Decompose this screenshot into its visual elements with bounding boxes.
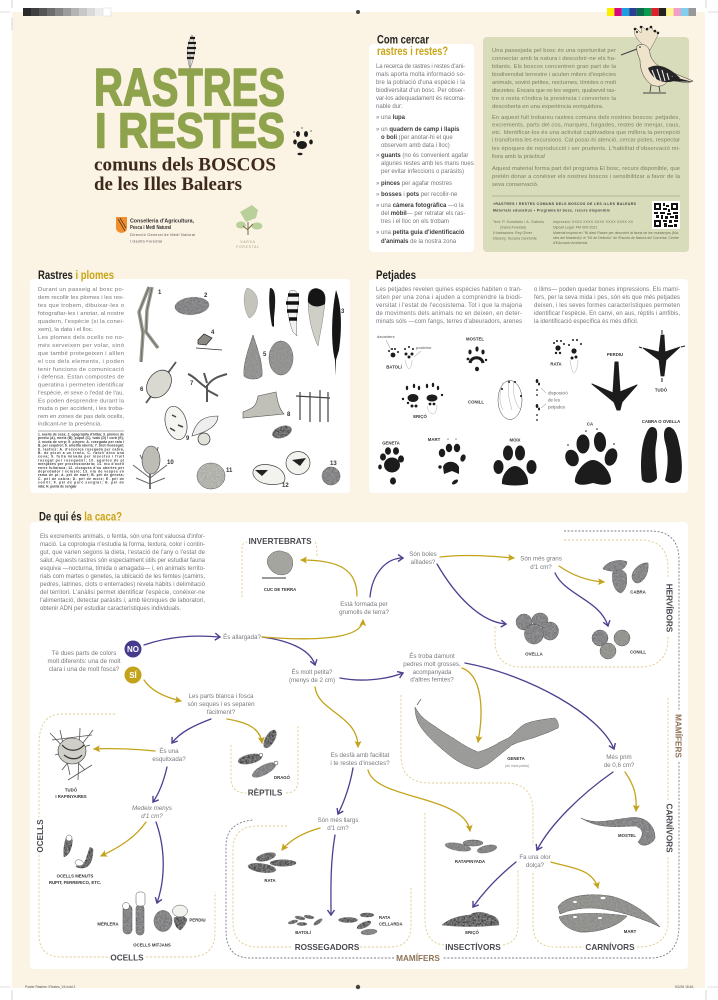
specimen: ocells menuts: RUPIT, FERRERICO, ETC.	[49, 880, 101, 885]
credits: Dipòsit Legal: PM 000-2021	[553, 226, 597, 230]
credits: Materials educatius • Programa El bosc, recurs disponible	[493, 208, 610, 212]
list: equipment: » una petita guia d'identificació	[376, 230, 465, 236]
title	[94, 58, 285, 158]
text: de qui és la caca: obtenir ADN per estudiar característiques individuals.	[40, 606, 181, 612]
text: intro: La recerca de rastres i restes d'ani-	[376, 64, 465, 70]
track: conill	[468, 380, 522, 420]
specimen: mostel: MOSTEL	[618, 833, 636, 838]
group labels: INSECTÍVORS	[445, 942, 501, 952]
text: de qui és la caca: del territori. L'anàlisi permet identificar l'espècie, conèixer-ne	[40, 590, 206, 596]
illustration numbers: 4	[211, 330, 215, 336]
track: mart	[428, 437, 467, 485]
icon: paw print	[293, 127, 313, 155]
track: tudó: TUDÓ	[655, 388, 668, 392]
caption: numbered key: B. de picot a un tronc, C. ratolí dins una	[38, 451, 124, 455]
track: perdiu: PERDIU	[607, 352, 623, 357]
text: petjades column 2: la identificació específica és més difícil.	[534, 319, 639, 325]
text: intro: nable dur:	[376, 104, 403, 110]
text: rastres i plomes: quadern, l'espècie (si la conei-	[38, 319, 124, 325]
specimen: ocells mitjans: OCELLS MITJANS	[133, 942, 171, 948]
flow: questions: grumolls de terra?	[339, 609, 389, 616]
credits: (Xarxa Forestal)	[500, 226, 526, 230]
text: rastres i plomes: Les plomes dels ocells no no-	[38, 335, 124, 341]
track: moix	[494, 438, 536, 486]
specimen: eriçó	[442, 912, 499, 935]
flow: questions: aïllades?	[411, 559, 436, 566]
illustration numbers: 6	[140, 387, 144, 393]
specimen: rata cellarda: CELLARDA	[379, 922, 403, 926]
flow: questions: Les parts blanca i fosca	[188, 693, 254, 700]
text: paragraph 2: les èpoques de reproducció i ser prudents. L'habilitat d'observació mi-	[492, 146, 680, 152]
specimen: mart	[558, 895, 660, 934]
text: paragraph 2: etc. Identificar-los és una activitat captivadora que millora la percepció	[492, 130, 680, 136]
flow: yellow yes arrows	[94, 555, 636, 888]
illustration numbers: 8	[287, 412, 291, 418]
footer print data	[25, 985, 693, 989]
text: petjades column 2	[534, 287, 680, 325]
specimen: geneta: GENETA	[507, 756, 525, 761]
footer print data: Poster Rastres i Restes_V4.indd 2	[25, 985, 76, 989]
list: equipment: » pinces per agafar mostres	[376, 181, 452, 187]
flow: questions: Són boles	[409, 551, 437, 558]
text: petjades column 1: siten per una zona i ajuden a comprendre la biodi-	[376, 295, 522, 301]
list: equipment: d'animals de la nostra zona	[381, 239, 457, 245]
flow: yes and no buttons: NO	[127, 645, 139, 654]
track: moix: MOIX	[510, 438, 521, 442]
illustrations: feathers	[244, 288, 341, 376]
caption: numbered key: rosegat per rosegador; 10. agulles de pi	[38, 458, 124, 462]
flow: yes and no buttons	[124, 640, 142, 684]
title: I RESTES	[95, 104, 285, 158]
flow: questions: (menys de 2 cm)	[289, 677, 335, 684]
specimen: tudó i rapinyaires	[50, 728, 93, 799]
label: disposició de les petjades	[536, 379, 568, 421]
credits: Il·lustracions: Rey Oliver	[493, 231, 533, 235]
text: rastres i plomes: l'espècie, el sexe o l'edat de l'au.	[38, 390, 124, 396]
text: petjades column 1: de moviments dels animals no en deixen, en deter-	[376, 311, 522, 317]
colour calibration bar	[607, 8, 696, 16]
credits: Material inspirat en "Ni ales! Rastre per descobrir la fauna de les muntanyes (Ma-	[553, 231, 680, 235]
illustration numbers: 11	[226, 468, 233, 474]
track: rata: RATA	[550, 362, 562, 366]
flow: questions: són seques i es separen	[187, 701, 255, 708]
text: intro	[376, 64, 466, 110]
flow: questions: de 0,6 cm?	[604, 762, 635, 769]
caption: numbered key	[38, 432, 125, 488]
flow: questions: Fa una olor	[519, 854, 551, 861]
flow: questions: molt diferents: una de molt	[48, 658, 121, 665]
track: batolí: BATOLÍ	[386, 364, 403, 370]
caption: numbered key: 1. anells de cesa; 2. egagròpila d'òliba; 3. plomes de	[38, 432, 124, 436]
text: paragraph 1: tre o resta n'indica la presència i converteix la	[492, 96, 617, 102]
track: eriçó	[402, 383, 443, 419]
caption: numbered key: entre fullaraca; 12. closques d'ou obertes per	[38, 466, 125, 470]
specimen: batolí: BATOLÍ	[295, 930, 312, 935]
forest network logo: FORESTAL	[236, 245, 260, 249]
flow: questions: esquitxada?	[152, 756, 186, 763]
text: rastres i plomes: indicant-ne la presència.	[38, 422, 102, 428]
group labels: HERVÍBORS	[664, 584, 674, 633]
QR code	[652, 201, 680, 229]
subtitle: comuns dels BOSCOS	[94, 156, 276, 176]
text: petjades column 1	[376, 287, 523, 325]
text: paragraph 2: excrements, parts del cos, marques, furgades, restes de menjar, caus,	[492, 122, 680, 128]
flow: questions: d'altres femtes?	[410, 676, 454, 684]
greyscale calibration bar	[23, 8, 111, 16]
text: rastres i plomes: tenir funcions de comunicació	[38, 367, 125, 373]
text: paragraph 1: biodiversitat terrestre i aculen milers d'espècies	[492, 72, 616, 78]
credits: sies del Maestrat) i el "Kit de Detectiu" de l'Escola de Natura del Corredor, Centre	[553, 236, 679, 240]
text: paragraph 3: Aquest material forma part del programa El bosc, recurs disponible, que	[492, 166, 680, 172]
list: equipment: » una càmera fotogràfica —o la	[376, 203, 464, 209]
text: intro: biodiversitat d'un bosc. Per obser-	[376, 88, 465, 94]
text: paragraph 1: connectar amb la natura i descobrir-ne els ha-	[492, 56, 616, 62]
specimen: ovella	[516, 613, 558, 656]
flow: questions: fàcilment?	[207, 709, 236, 716]
subtitle	[94, 156, 276, 195]
illustration numbers: 5	[263, 352, 267, 358]
illustration numbers: 2	[204, 293, 208, 299]
text: paragraph 2: llora amb la pràctica!	[492, 154, 546, 160]
flow: questions: És troba damunt	[409, 653, 455, 660]
group outlines: mammals and others	[39, 531, 679, 958]
illustration numbers: 7	[190, 381, 194, 387]
text: de qui és la caca: Els excrements animals, o femta, són una font valuosa d'infor-	[40, 534, 205, 540]
illustration numbers: 12	[282, 483, 289, 489]
text: rastres i plomes: fotografiar-les i anotar, al nostre	[38, 311, 125, 317]
specimen: ocells menuts: OCELLS MENUTS	[57, 874, 94, 878]
specimen: cabra: CABRA	[630, 590, 646, 594]
flow: purple no arrows	[144, 558, 614, 915]
footer print data: 5/2/26 18:46	[675, 985, 693, 989]
text: rastres i plomes: i defensa. Estan compostes de	[38, 374, 125, 380]
government logo: i Gestió Forestal	[130, 240, 162, 244]
text: petjades column 2: o llims— poden quedar bones impressions. Els mamí-	[534, 287, 680, 293]
list: equipment: » guants (no és convenient agafar	[376, 153, 468, 159]
caption: numbered key: depredador i eclosió; 13. niu de vespes en	[38, 470, 124, 474]
text: de qui és la caca: esquiva —nocturna, tímida o amagada— i, en animals territo-	[40, 566, 205, 572]
flow: questions: Té dues parts de colors	[52, 650, 116, 657]
text: rastres i plomes: el cos dels elements, i poden	[38, 359, 124, 365]
icon: striped feather	[187, 35, 196, 70]
illustration numbers: 1	[158, 290, 162, 296]
caption: numbered key: cova; 9. fulla minada per insectes i fruit	[38, 455, 125, 459]
list: equipment: per evitar infeccions o paràsits)	[381, 169, 464, 175]
text: paragraph 1: Una passejada pel bosc és una oportunitat per	[492, 48, 616, 54]
heading: com cercar: rastres i restes?	[377, 46, 448, 58]
group labels: INVERTEBRATS	[248, 537, 312, 546]
flow: questions: pedres molt grosses,	[403, 661, 461, 668]
text: petjades column 2: identificar l'espècie. En canvi, en aus, rèptils i amfibis,	[534, 311, 680, 317]
specimen: ocells menuts	[49, 835, 101, 885]
track: batolí	[377, 334, 432, 370]
flow: questions: Són més grans	[520, 556, 562, 562]
flow: questions	[48, 551, 635, 869]
flow: questions: És una	[159, 748, 179, 755]
specimen: geneta: (de mida petita)	[505, 764, 529, 768]
label: disposició de les petjades: disposició	[548, 390, 568, 396]
list: equipment: » bosses i pots per recollir-ne	[376, 192, 458, 198]
label: disposició de les petjades: de les	[548, 398, 561, 402]
group labels: CARNÍVORS	[585, 942, 635, 952]
caption: numbered key: rata; H. punta de senglar	[38, 484, 77, 488]
flow: questions: d'1 cm?	[141, 813, 163, 820]
heading: rastres i plomes: Rastres i plomes	[38, 270, 114, 282]
illustration numbers	[140, 290, 345, 489]
track: mart: MART	[428, 437, 441, 442]
specimen: dragó: DRAGÓ	[274, 775, 291, 780]
text: de qui és la caca: pedres, latrines, clots o enterrades) revela hàbits i delimitació	[40, 582, 206, 588]
government logo: Pesca i Medi Natural	[130, 225, 172, 231]
track: ca	[563, 422, 619, 485]
illustrations: remains	[133, 287, 340, 489]
text: rastres i plomes: muda o per accident, i les troba-	[38, 406, 124, 412]
list: equipment: » un quadern de camp i llapis	[376, 127, 460, 133]
specimen: ratapinyada	[445, 840, 498, 864]
track: geneta: GENETA	[382, 440, 400, 446]
illustration numbers: 3	[341, 309, 345, 315]
text: intro: var-los adequadament és recoma-	[376, 96, 465, 102]
text: rastres i plomes: queratina i permeten identificar	[38, 382, 124, 388]
text: paragraph 1	[492, 48, 617, 110]
caption: numbered key: menjades per processionària; 11. niu d'ocell	[38, 462, 124, 466]
track: mostel: MOSTEL	[466, 336, 484, 342]
forest network logo: XARXA	[240, 240, 256, 244]
flow: questions: dolça?	[526, 862, 545, 869]
caption: numbered key: C. pèl de cabra; D. pèl de moix; E. pèl de	[38, 477, 124, 481]
text: rastres i plomes: dem recollir les plomes i les res-	[38, 295, 124, 301]
text: de qui és la caca: gut, que varien segons la dieta, l'estació de l'any o l'estat de	[40, 550, 206, 556]
list: equipment: o boli (per anotar-hi el que	[381, 135, 453, 141]
specimen: rata: RATA	[264, 878, 276, 883]
specimen: geneta	[415, 699, 558, 769]
flow: questions: És molt petita?	[292, 669, 333, 676]
list: equipment: del mòbil— per retratar els ras-	[381, 211, 465, 217]
specimen: rata cellarda	[338, 913, 403, 935]
caption: numbered key: 4. muda de serp; 5. pinyes: A. rosegada per rata i	[38, 440, 124, 444]
caption: numbered key: rama de pi; A. pèl de mart; B. pèl de geneta;	[38, 473, 124, 477]
specimen: conill	[592, 630, 646, 659]
track: tudó	[639, 330, 685, 392]
specimen: batolí	[288, 915, 323, 935]
specimen: mostel	[581, 817, 655, 845]
flow: questions: acompanyada	[413, 669, 452, 676]
credits: «RASTRES I RESTES COMUNS DELS BOSCOS DE LES ILLES BALEARS	[493, 202, 637, 206]
text: paragraph 3: seva conservació.	[492, 182, 539, 188]
credits	[493, 202, 680, 245]
group labels: CARNÍVORS	[664, 803, 674, 853]
specimen: mart: MART	[624, 929, 637, 934]
group labels: MAMÍFERS	[396, 953, 440, 963]
track: perdiu	[592, 352, 637, 410]
text: intro: mals aporta molta informació so-	[376, 72, 465, 78]
flow: questions: d'1 cm?	[327, 825, 349, 832]
flow: yes and no buttons: SÍ	[129, 671, 138, 680]
heading: com cercar: Com cercar	[377, 34, 429, 46]
panel: com cercar	[369, 34, 474, 252]
panel: rastres i plomes	[30, 270, 350, 493]
track: rata	[550, 339, 582, 373]
credits: Text: P. Gandlallo / A. Gabiols	[493, 220, 544, 224]
specimen: ocells mitjans	[97, 892, 206, 948]
text: petjades column 2: deixen, i les seves formes característiques permeten	[534, 303, 680, 309]
group labels: ROSSEGADORS	[295, 943, 360, 952]
text: rastres i plomes: rem en zones de pas dels ocells,	[38, 414, 124, 420]
text: rastres i plomes: xem), la data i el lloc.	[38, 327, 94, 333]
illustration numbers: 10	[167, 460, 174, 466]
track: geneta	[378, 440, 404, 485]
specimen: dragó	[237, 728, 291, 780]
list: equipment: » una lupa	[376, 115, 406, 121]
heading: com cercar	[377, 34, 448, 58]
illustration: hoopoe	[621, 26, 693, 93]
caption: numbered key: B. per esquirol; 6. ametlla oberta; 7. brot mossegat;	[38, 444, 124, 448]
text: petjades column 1: minats sòls —com fangs, terres d'abeuradors, arenes	[376, 319, 522, 325]
track: batolí: posterior	[416, 345, 432, 350]
list: equipment: algunes restes amb les mans nues	[381, 161, 474, 167]
text: paragraph 1: descoberta en una experiència enriquidora.	[492, 104, 604, 110]
text: paragraph 1: animals, sovint petites, nocturnes, tímides o molt	[492, 80, 616, 86]
flow: questions: Està formada per	[340, 601, 388, 608]
caption: numbered key: conill; F. pèl de porc senglar; G. pèl de	[38, 481, 124, 485]
heading: de qui és la caca: De qui és la caca?	[39, 512, 122, 524]
text: intro: bre la població d'una espècie i la	[376, 80, 466, 86]
credits: Impressió: XXXX XXXX XXXX XXXX XXXX XX	[553, 220, 634, 224]
flow: questions: clara i una de molt fosca?	[49, 666, 120, 673]
list: equipment	[376, 115, 474, 245]
flow: questions: Medeix menys	[132, 805, 172, 812]
specimen: ocells mitjans: PERDIU	[189, 918, 206, 922]
text: paragraph 1: discretes. Encara que no les vegem, qualsevol ras-	[492, 88, 616, 94]
heading: petjades: Petjades	[376, 270, 416, 282]
specimen: cuc de terra	[262, 551, 296, 592]
government logo	[116, 217, 195, 244]
specimen: rata	[248, 851, 296, 883]
track: mart: A	[447, 437, 449, 441]
text: de qui és la caca: salut. Aquests rastres són especialment útils per estudiar fauna	[40, 558, 206, 564]
text: rastres i plomes: Durant un passeig al bosc po-	[38, 287, 124, 293]
track: ca: CA	[587, 422, 593, 426]
text: de qui és la caca: l'alimentació, detectar paràsits i, amb tècniques de laboratori,	[40, 598, 205, 604]
specimen: eriçó: ERIÇÓ	[465, 930, 479, 935]
text: petjades column 2: fers, per la seva mida i pes, són els que més petjades	[534, 295, 680, 301]
text: petjades column 1: Les petjades revelen quines espècies habiten o tran-	[376, 287, 522, 293]
specimen: ratapinyada: RATAPINYADA	[455, 859, 485, 864]
list: equipment: tres i el lloc on els trobam	[381, 219, 449, 225]
text: de qui és la caca	[40, 534, 206, 612]
text: rastres i plomes: tes que trobem, dibuixar-les o	[38, 303, 125, 309]
group labels: MAMÍFERS	[674, 714, 684, 758]
specimen: tudó i rapinyaires: TUDÓ	[65, 788, 78, 792]
track: batolí: davanters	[377, 334, 395, 339]
flow: questions: Són més llargs	[318, 817, 358, 824]
subtitle: de les Illes Balears	[94, 175, 242, 195]
flow: questions: Més prim	[606, 754, 632, 761]
track: mostel	[466, 336, 487, 371]
list: equipment: observem amb data i lloc)	[381, 143, 450, 149]
track: mart: A	[455, 437, 457, 441]
panel: de qui és la caca	[30, 512, 688, 969]
text: paragraph 1: bitants. Els boscos concentren gran part de la	[492, 64, 617, 70]
track: conill: CONILL	[468, 400, 484, 404]
track: cabra o ovella	[641, 419, 682, 483]
text: de qui és la caca: mació. La coprologia n'estudia la forma, textura, color i contin-	[40, 542, 205, 548]
panel: petjades	[369, 270, 688, 493]
track: eriçó: ERIÇÓ	[413, 414, 427, 419]
flow: questions: Es desfà amb facilitat	[331, 752, 390, 759]
text: petjades column 1: versitat i l'estat de l'ecosistema. Tot i que la majoria	[376, 303, 523, 309]
group labels: OCELLS	[110, 954, 144, 962]
flow: questions: d'1 cm?	[530, 564, 552, 571]
text: rastres i plomes: Es poden desprendre durant la	[38, 398, 125, 404]
panel: introduction	[483, 37, 689, 252]
text: rastres i plomes: que també protegeixen i aïllen	[38, 351, 124, 357]
group labels: OCELLS	[36, 819, 45, 853]
text: de qui és la caca: rials com martes o genetes, la ubicació de les femtes (camins,	[40, 574, 205, 580]
title: RASTRES	[94, 58, 285, 118]
government logo: Direcció General de Medi Natural	[130, 233, 195, 237]
caption: numbered key: perdiu (A), merla (B), puput (C), tudó (D) i corb (E);	[38, 436, 124, 440]
specimen: cabra	[603, 560, 648, 594]
specimen: ocells mitjans: MÈRLERA	[97, 922, 119, 926]
specimen: ovella: OVELLA	[525, 652, 543, 656]
track: cabra o ovella: CABRA O OVELLA	[642, 419, 680, 424]
specimen: cuc de terra: CUC DE TERRA	[264, 587, 296, 592]
illustration numbers: 9	[186, 436, 190, 442]
specimen: rata cellarda: RATA	[379, 915, 390, 920]
text: paragraph 3	[492, 166, 681, 188]
flow: questions: És allargada?	[223, 634, 261, 641]
text: paragraph 2	[492, 115, 680, 160]
text: paragraph 3: pretén donar a conèixer els nostres boscos i sensibilitzar a favor de la	[492, 174, 681, 180]
credits: Disseny: Susana Carefonte	[493, 236, 537, 240]
text: rastres i plomes: més serveixen per volar, sinó	[38, 343, 125, 349]
flow: questions: i te restes d'insectes?	[330, 760, 390, 767]
caption: numbered key: 8. rastres: A. d'escorça rosegada per cabra,	[38, 447, 124, 451]
text: rastres i plomes	[38, 287, 125, 428]
group labels	[36, 537, 684, 963]
forest network logo	[236, 205, 262, 249]
illustration numbers: 13	[330, 461, 337, 467]
text: paragraph 2: En aquest full trobareu rastres comuns dels nostres boscos: petjades,	[492, 115, 680, 121]
specimen: tudó i rapinyaires: I RAPINYAIRES	[55, 794, 87, 799]
group labels: RÈPTILS	[248, 788, 283, 798]
credits: d'Educació Ambiental	[553, 241, 587, 245]
text: paragraph 2: i transforma les excursions. Cal posar-hi atenció, cercar pistes, respectar	[492, 138, 680, 144]
government logo: Conselleria d'Agricultura,	[130, 218, 195, 224]
label: disposició de les petjades: petjades	[548, 404, 566, 410]
specimen: conill: CONILL	[630, 650, 646, 654]
